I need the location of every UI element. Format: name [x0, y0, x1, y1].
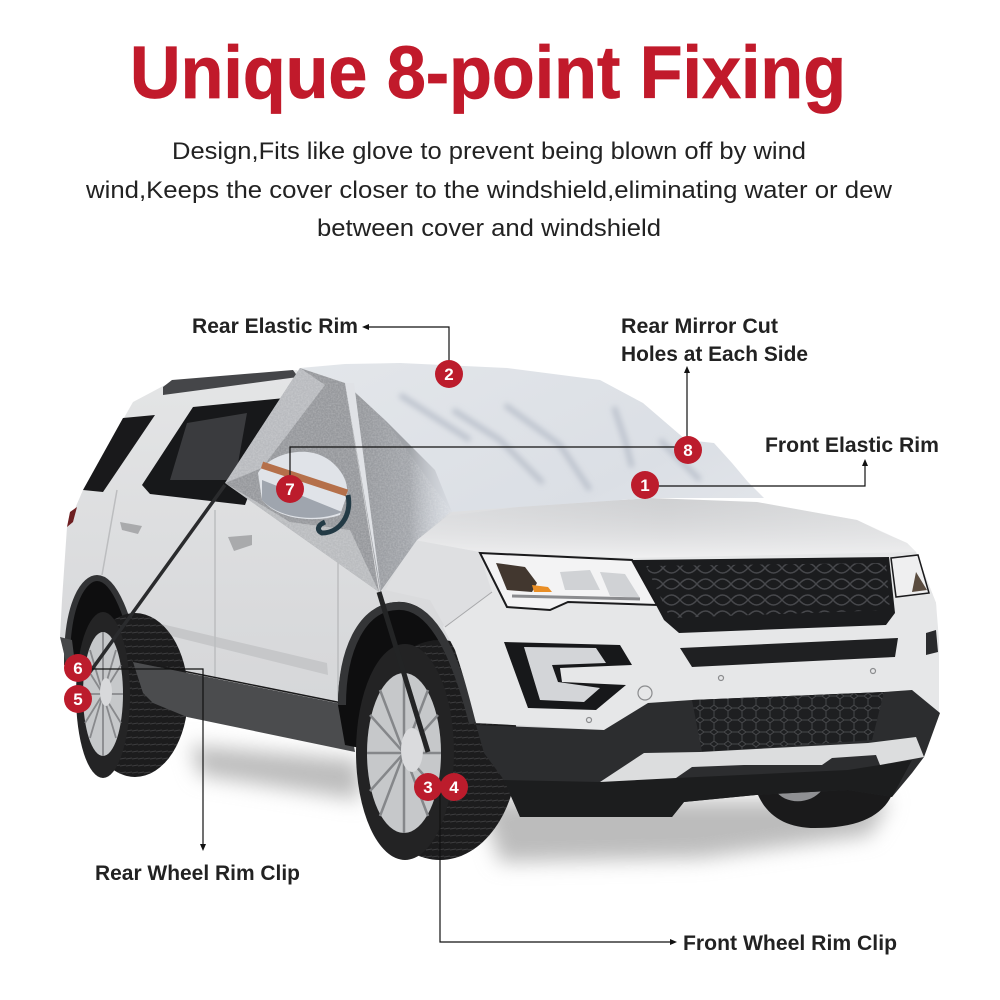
door crease — [147, 622, 328, 675]
windshield cover — [225, 363, 764, 592]
marker 5 — [64, 685, 92, 713]
callout labels: Front Wheel Rim Clip — [683, 932, 897, 955]
fender line — [445, 592, 492, 627]
roof rail — [163, 370, 298, 395]
orange strip — [262, 465, 347, 493]
marker 2 — [435, 360, 463, 388]
rear wheel — [76, 612, 188, 778]
marker 4 — [440, 773, 468, 801]
marker 4: 4 — [449, 778, 459, 797]
parking sensors — [586, 668, 876, 722]
callout labels — [95, 315, 939, 955]
flap streak — [345, 383, 381, 592]
door lines — [102, 490, 338, 705]
flap speckle — [225, 368, 452, 592]
rear quarter window — [83, 415, 155, 492]
marker 2: 2 — [444, 365, 454, 384]
cover main sheet — [300, 363, 764, 592]
callout labels: Rear Elastic Rim — [192, 315, 358, 338]
callout labels: Holes at Each Side — [621, 343, 808, 366]
callout labels: Rear Wheel Rim Clip — [95, 862, 300, 885]
description text: Design,Fits like glove to prevent being blown off by wind — [172, 138, 806, 165]
mirror hole — [258, 452, 347, 519]
right headlight — [891, 555, 929, 597]
mid slot — [680, 638, 898, 667]
marker 3: 3 — [423, 778, 433, 797]
front fender — [385, 540, 492, 627]
numbered markers — [64, 360, 702, 801]
cover dark side — [345, 383, 452, 592]
front strap — [379, 592, 428, 752]
rocker panel — [133, 662, 355, 752]
bumper shadow band — [504, 760, 912, 817]
cover folds — [400, 395, 700, 490]
marker 5: 5 — [73, 690, 83, 709]
rear wheel arch — [67, 578, 137, 662]
description text: between cover and windshield — [317, 215, 661, 242]
marker 7 — [276, 475, 304, 503]
lower grille — [692, 692, 884, 752]
marker 7: 7 — [285, 480, 295, 499]
door handles — [120, 522, 252, 551]
mirror flap — [225, 368, 379, 592]
rear bumper lower — [60, 637, 76, 672]
description text: wind,Keeps the cover closer to the windshield,eliminating water or dew — [85, 177, 892, 204]
marker 8: 8 — [683, 441, 693, 460]
car illustration — [60, 370, 940, 860]
skid plate — [600, 737, 924, 782]
ground shadow — [190, 745, 890, 862]
main grille — [632, 557, 895, 633]
callout labels: Front Elastic Rim — [765, 434, 939, 457]
marker 6: 6 — [73, 659, 83, 678]
marker 3 — [414, 773, 442, 801]
headlight — [480, 553, 657, 610]
side window — [142, 398, 285, 505]
marker 8 — [674, 436, 702, 464]
title: Unique 8-point Fixing — [130, 31, 846, 114]
callout lines — [78, 327, 865, 942]
fog lamp — [504, 642, 632, 710]
mirror elastic — [318, 495, 349, 533]
hood — [414, 498, 916, 558]
front right edge lamp — [926, 630, 938, 655]
front wheel arch — [338, 602, 476, 770]
callout arrowheads — [200, 324, 868, 945]
callout labels: Rear Mirror Cut — [621, 315, 778, 338]
car body side — [60, 370, 939, 817]
marker 6 — [64, 654, 92, 682]
front wheel — [356, 640, 518, 860]
tail light — [67, 507, 77, 527]
front arch band — [342, 606, 473, 723]
marker 1 — [631, 471, 659, 499]
marker 1: 1 — [640, 476, 650, 495]
front bumper lower — [476, 690, 940, 817]
rear strap — [90, 485, 225, 672]
description text — [85, 138, 892, 242]
front fascia — [443, 552, 939, 730]
far front wheel — [756, 790, 894, 828]
